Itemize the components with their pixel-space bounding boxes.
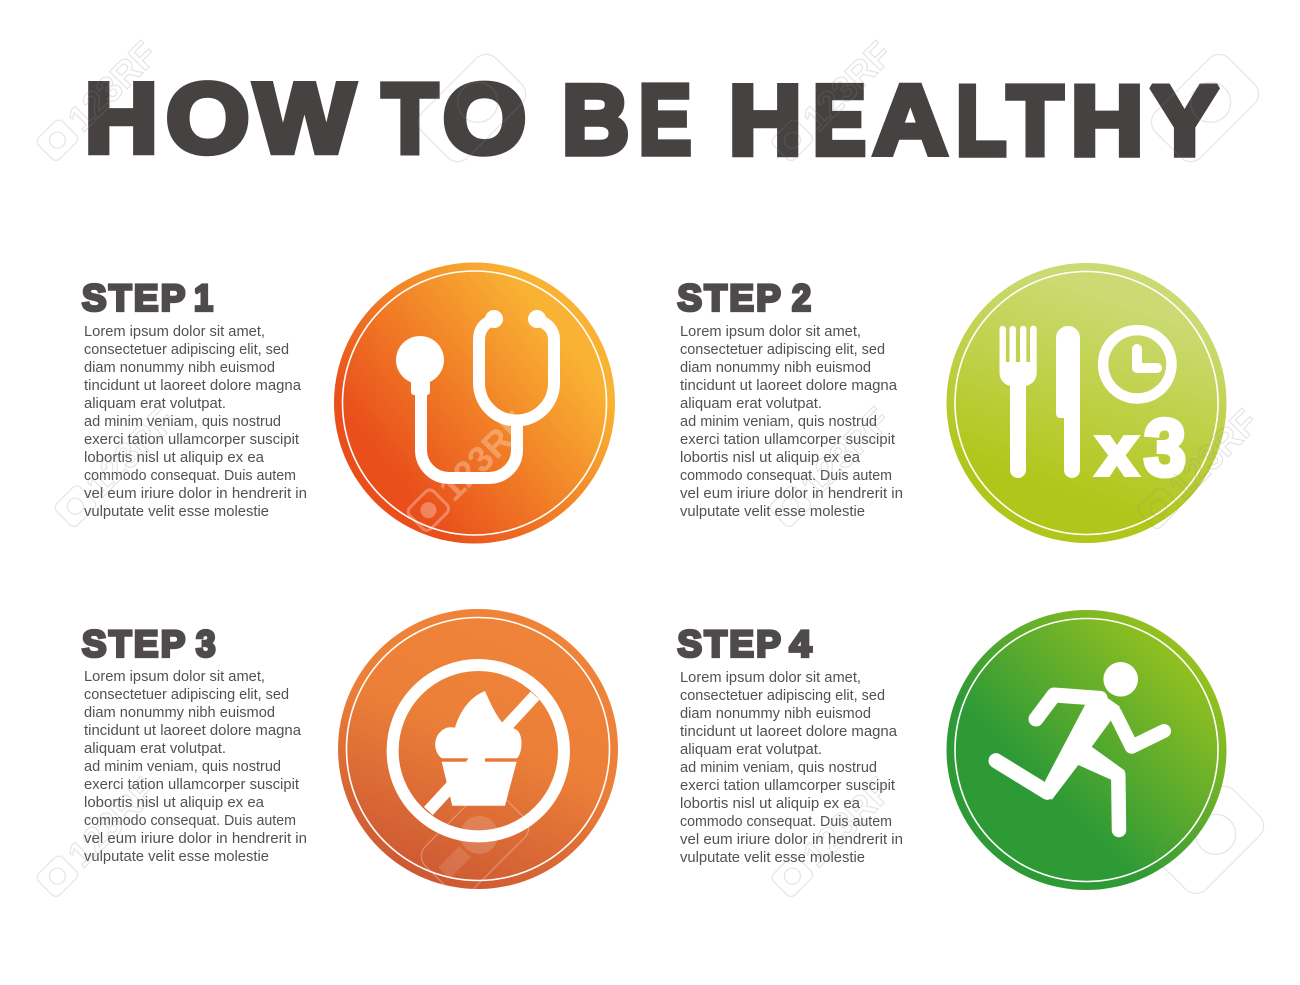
icon: meals badge (946, 263, 1226, 543)
watermark stamps: 123RF (431, 403, 536, 509)
text block: step 2: commodo consequat. Duis autem (680, 468, 892, 484)
text block: step 2: exerci tation ullamcorper suscipit (680, 432, 895, 448)
text block: step 2 (680, 324, 903, 520)
text block: step 3: lobortis nisl ut aliquip ex ea (84, 795, 265, 811)
text block: step 3 (84, 669, 307, 865)
heading: step 1: 1 (194, 276, 213, 318)
watermark stamps: 123RF (795, 769, 900, 875)
panel: step 1 text (82, 276, 307, 520)
text block: step 4: diam nonummy nibh euismod (680, 706, 871, 722)
text block: step 1: vel eum iriure dolor in hendrerit in (84, 486, 307, 502)
text block: step 3: aliquam erat volutpat. (84, 741, 226, 757)
text block: step 4: Lorem ipsum dolor sit amet, (680, 670, 861, 686)
heading: step 1: STEP (82, 276, 188, 318)
text block: step 1: commodo consequat. Duis autem (84, 468, 296, 484)
title: H (729, 65, 802, 175)
text block: step 2: tincidunt ut laoreet dolore magna (680, 378, 898, 394)
icon: knife (1056, 326, 1080, 478)
panel: step 2 text (678, 276, 903, 520)
text block: step 3: consectetuer adipiscing elit, sed (84, 687, 289, 703)
watermark stamps: 123RF (1161, 401, 1266, 507)
title: E (639, 64, 691, 174)
watermark stamps: 123RF (60, 33, 165, 139)
text block: step 1: aliquam erat volutpat. (84, 396, 226, 412)
title: H (1071, 66, 1143, 176)
heading: step 4: STEP (678, 622, 783, 664)
text block: step 3: vel eum iriure dolor in hendrerit in (84, 831, 307, 847)
heading: step 2: 2 (792, 276, 811, 318)
text block: step 1: ad minim veniam, quis nostrud (84, 414, 281, 430)
text: x3 (1097, 403, 1186, 492)
title: B (562, 64, 629, 174)
watermark stamps: 123RF (793, 399, 898, 505)
text block: step 3: exerci tation ullamcorper suscipit (84, 777, 299, 793)
title: O (166, 63, 250, 173)
text block: step 3: diam nonummy nibh euismod (84, 705, 275, 721)
text block: step 2: vulputate velit esse molestie (680, 504, 865, 520)
text block: step 3: vulputate velit esse molestie (84, 849, 269, 865)
text block: step 4: consectetuer adipiscing elit, sed (680, 688, 885, 704)
icon: running person badge (946, 610, 1226, 890)
icon: clock (1103, 330, 1172, 398)
text block: step 4: tincidunt ut laoreet dolore magna (680, 724, 898, 740)
text block: step 1: tincidunt ut laoreet dolore magna (84, 378, 302, 394)
title: W (255, 63, 355, 173)
heading: step 3: STEP (82, 622, 188, 664)
text block: step 4 (680, 670, 903, 866)
text block: step 1: consectetuer adipiscing elit, sed (84, 342, 289, 358)
text block: step 4: ad minim veniam, quis nostrud (680, 760, 877, 776)
heading: step 2: STEP (678, 276, 783, 318)
text block: step 1 (84, 324, 307, 520)
title: T (1007, 66, 1063, 176)
icon: fork (1000, 326, 1037, 478)
icon: prohibition sign (393, 665, 564, 836)
text block: step 3: ad minim veniam, quis nostrud (84, 759, 281, 775)
text block: step 2: ad minim veniam, quis nostrud (680, 414, 877, 430)
text block: step 2: vel eum iriure dolor in hendrerit in (680, 486, 903, 502)
title: A (873, 65, 947, 175)
title: E (813, 65, 866, 175)
title (85, 63, 1219, 176)
title: T (382, 64, 438, 174)
icon: cupcake (435, 691, 522, 806)
title: H (85, 63, 158, 173)
panel: step 3 text (82, 622, 307, 865)
text block: step 3: tincidunt ut laoreet dolore magna (84, 723, 302, 739)
text block: step 1: Lorem ipsum dolor sit amet, (84, 324, 265, 340)
watermark stamps: 123RF (60, 769, 165, 875)
text: x3: 3 (1144, 403, 1186, 492)
title: L (956, 65, 1006, 175)
text block: step 4: aliquam erat volutpat. (680, 742, 822, 758)
icon: stethoscope badge (334, 262, 615, 544)
icon: running person (996, 662, 1164, 830)
text block: step 2: Lorem ipsum dolor sit amet, (680, 324, 861, 340)
text block: step 1: exerci tation ullamcorper suscipit (84, 432, 299, 448)
text block: step 2: consectetuer adipiscing elit, sed (680, 342, 885, 358)
text block: step 4: vel eum iriure dolor in hendrerit in (680, 832, 903, 848)
text block: step 1: vulputate velit esse molestie (84, 504, 269, 520)
text block: step 3: commodo consequat. Duis autem (84, 813, 296, 829)
icon: no sweets badge (338, 609, 618, 889)
text block: step 2: aliquam erat volutpat. (680, 396, 822, 412)
text block: step 4: exerci tation ullamcorper suscipit (680, 778, 895, 794)
watermark stamps: 123RF (78, 399, 183, 505)
text block: step 4: lobortis nisl ut aliquip ex ea (680, 796, 861, 812)
text block: step 4: vulputate velit esse molestie (680, 850, 865, 866)
title: O (443, 64, 526, 174)
text block: step 3: Lorem ipsum dolor sit amet, (84, 669, 265, 685)
heading: step 4: 4 (790, 622, 812, 664)
icon: stethoscope (396, 310, 554, 478)
text block: step 2: lobortis nisl ut aliquip ex ea (680, 450, 861, 466)
text: x3: x (1097, 412, 1137, 490)
panel: step 4 text (678, 622, 903, 866)
title: Y (1150, 66, 1219, 176)
text block: step 1: lobortis nisl ut aliquip ex ea (84, 450, 265, 466)
watermark stamps: 123RF (795, 33, 900, 139)
text block: step 1: diam nonummy nibh euismod (84, 360, 275, 376)
text block: step 4: commodo consequat. Duis autem (680, 814, 892, 830)
text block: step 2: diam nonummy nibh euismod (680, 360, 871, 376)
heading: step 3: 3 (196, 622, 216, 664)
